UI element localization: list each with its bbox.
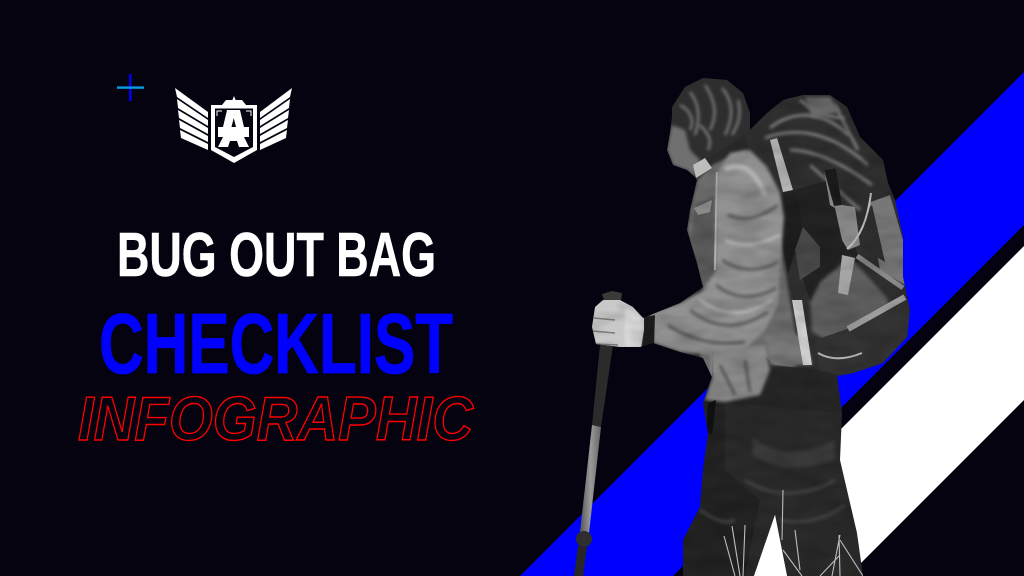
left wing — [175, 88, 208, 150]
blue diagonal band — [520, 72, 1024, 576]
wrist band — [642, 315, 655, 346]
star — [228, 96, 240, 107]
pants and base silhouette — [580, 70, 920, 576]
heading: infographic outline: INFOGRAPHIC — [78, 385, 474, 454]
white gap between the legs — [754, 515, 787, 576]
right wing — [260, 88, 292, 150]
side panel — [868, 195, 905, 285]
heading: bug out bag: BUG OUT BAG — [117, 221, 436, 290]
grass blades — [724, 490, 863, 576]
head — [667, 78, 750, 178]
shoulder strap — [770, 138, 793, 192]
fabric texture — [592, 97, 910, 566]
icon: plus mark — [117, 74, 144, 101]
hiker figure — [580, 70, 920, 576]
heading: checklist: CHECKLIST — [99, 297, 453, 392]
letter A with pistol — [218, 110, 249, 147]
waist strap — [792, 300, 812, 365]
lower jacket hem — [705, 300, 842, 413]
trouser folds — [683, 400, 845, 540]
pack straps — [857, 256, 903, 288]
upper arm sleeve — [650, 150, 784, 355]
top pouch — [810, 257, 890, 342]
side strap curve — [847, 193, 871, 249]
white diagonal band — [694, 246, 1024, 576]
jacket torso — [687, 150, 800, 400]
lower pouch — [815, 300, 912, 375]
trekking pole — [574, 291, 622, 576]
shield — [211, 100, 257, 163]
logo: winged shield emblem — [175, 88, 292, 163]
gloved hand — [592, 300, 644, 347]
backpack — [745, 92, 912, 380]
knife sheath — [824, 168, 860, 250]
corner brackets — [217, 111, 251, 116]
